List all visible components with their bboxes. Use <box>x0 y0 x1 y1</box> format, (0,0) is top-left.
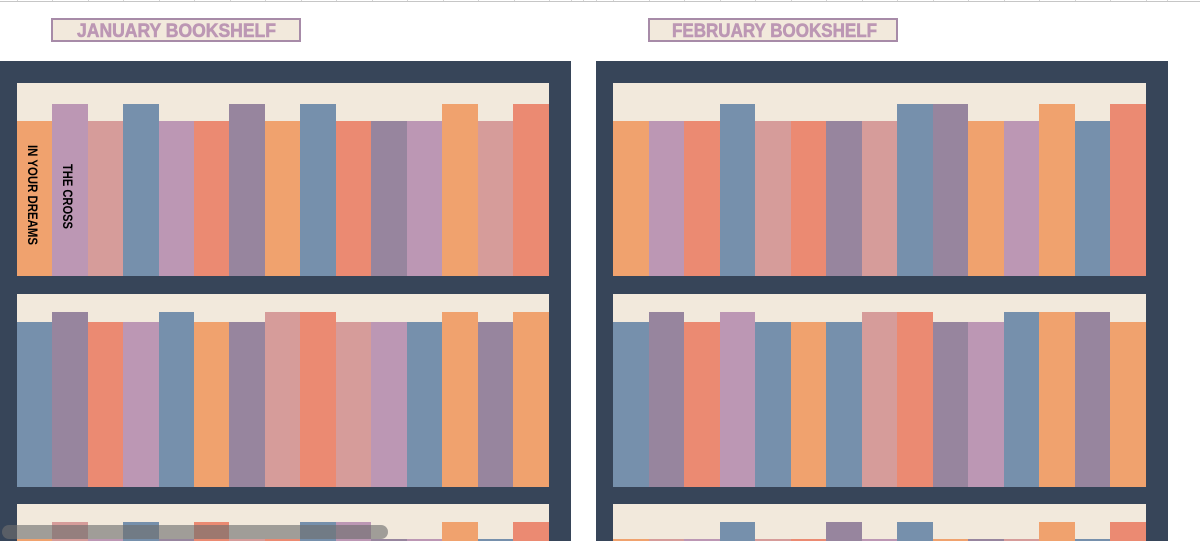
book title: The Cross: THE CROSS <box>60 164 76 229</box>
January shelf 3 <box>17 504 549 541</box>
February shelf 3 <box>613 504 1146 541</box>
heading: January bookshelf: JANUARY BOOKSHELF <box>77 21 276 42</box>
February shelf 2 <box>613 294 1146 487</box>
horizontal scrollbar <box>2 525 388 539</box>
panel: January bookshelf <box>0 61 571 541</box>
January shelf 1 <box>17 83 549 276</box>
spreadsheet column ruler <box>0 0 1200 2</box>
heading: February bookshelf: FEBRUARY BOOKSHELF <box>672 21 877 42</box>
January shelf 2 <box>17 294 549 487</box>
book title: In Your Dreams: IN YOUR DREAMS <box>25 145 41 245</box>
February shelf 1 <box>613 83 1146 276</box>
panel: February bookshelf <box>596 61 1168 541</box>
